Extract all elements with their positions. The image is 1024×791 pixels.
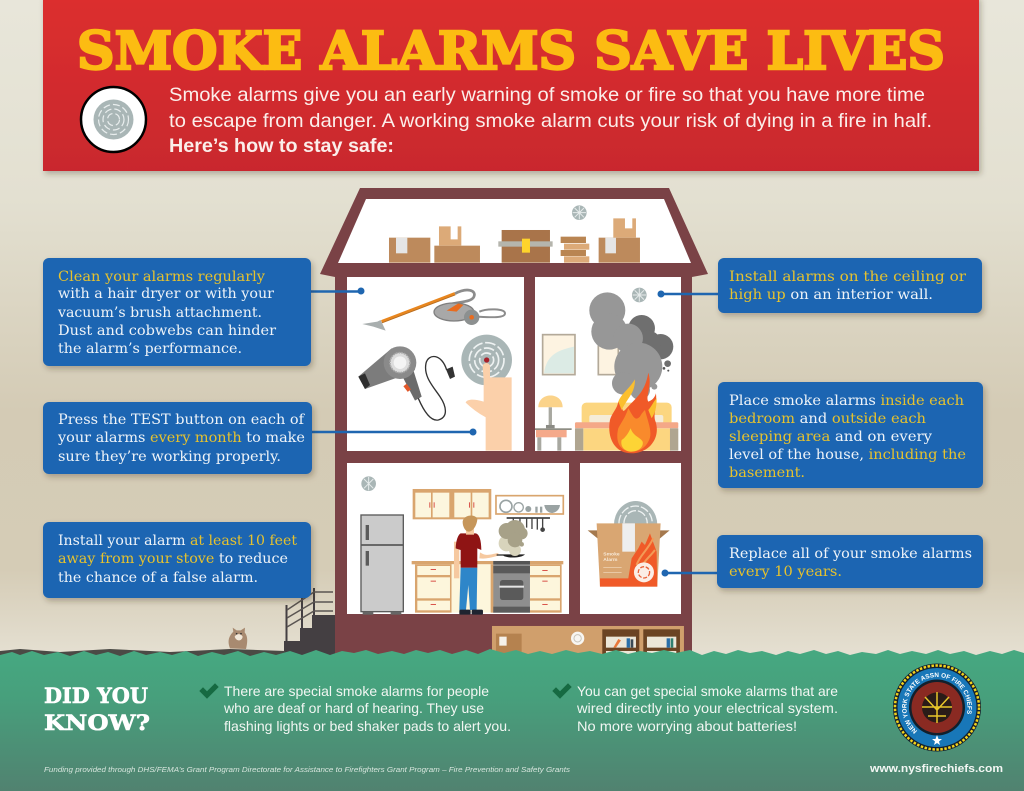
callout: replace alarms [717,535,983,588]
title: SMOKE ALARMS SAVE LIVES [77,21,945,82]
connector: ceiling [658,290,722,298]
icon: smoke alarm badge [81,87,146,152]
storage chest [498,230,553,263]
connector: clean alarms [305,288,364,294]
green lawn panel [0,649,1024,791]
callout: stove distance: away from your stove to reduce [58,551,288,567]
refrigerator [361,515,403,615]
attic room [338,199,691,263]
intro text [169,84,932,157]
upper cabinets [413,489,491,519]
room: replacement [580,463,681,614]
did you know heading: DID YOU [44,683,148,708]
fact two: No more worrying about batteries! [577,718,797,734]
kitchen contents [361,476,563,615]
stack of books [561,237,589,263]
did you know heading: KNOW? [44,710,150,735]
hanging utensils [507,518,550,531]
fact two: wired directly into your electrical system. [576,700,838,716]
callout: clean alarms: vacuum’s brush attachment. [57,305,262,321]
logo: fire chiefs seal [893,664,981,752]
callout: ceiling placement: high up on an interior wall. [729,287,933,303]
fact one: There are special smoke alarms for people [224,683,489,699]
callout: clean alarms: the alarm’s performance. [58,341,242,357]
callout: test button [43,402,312,474]
callout: clean alarms: with a hair dryer or with your [58,286,274,302]
cat [229,628,247,649]
header banner [43,0,979,171]
basement [492,626,684,656]
room: kitchen [347,463,569,614]
wall pictures [543,335,618,375]
bedroom contents [535,288,678,453]
flames [609,373,657,453]
bookshelves [602,629,680,656]
icon: bedroom alarm [632,288,647,302]
icon: basement alarm [571,632,584,645]
callout: ceiling placement: Install alarms on the ceiling or [729,269,966,285]
callout: ceiling placement [718,258,982,313]
cardboard box [597,523,661,587]
lower cabinets [412,561,563,613]
connector: test button [305,428,476,436]
callout: replace alarms: every 10 years. [729,564,842,580]
icon: check mark [553,684,571,698]
big alarm [461,335,512,385]
did you know heading [44,683,150,735]
cleaning room contents [358,290,512,451]
icon: alarm in box [614,501,657,525]
cardboard box: Alarm [603,557,618,563]
connector: replace [662,570,722,576]
callout: stove distance: the chance of a false alarm. [58,570,258,586]
callout: stove distance [43,522,311,598]
exterior stairs [284,588,335,655]
smoke cloud [589,292,673,400]
callout: clean alarms: Dust and cobwebs can hinder [58,323,276,339]
stove smoke [499,520,528,556]
icon: check mark [200,684,218,698]
hair dryer [358,346,455,420]
fact one: who are deaf or hard of hearing. They use [223,700,484,716]
vacuum cleaner [362,290,505,331]
callout: replace alarms: Replace all of your smoke alarms [729,546,972,562]
callout: bedroom placement: Place smoke alarms inside each [729,393,964,409]
attic contents [389,205,640,263]
callout: clean alarms: Clean your alarms regularly [58,269,265,285]
person cooking [454,516,525,615]
room: cleaning [347,277,524,451]
intro text: Smoke alarms give you an early warning of smoke or fire so that you have more time [169,84,925,106]
stove [493,561,530,613]
logo: fire chiefs seal: NEW YORK STATE ASSN OF FIRE CHIEFS [902,672,972,734]
fact two [553,683,838,734]
icon: kitchen alarm [361,476,376,491]
hand pressing button [466,363,512,451]
bed [575,403,678,451]
callout: bedroom placement: level of the house, including the [729,447,966,463]
dish shelf [496,496,563,514]
callout: test button: Press the TEST button on each of [58,412,306,428]
fact one [200,683,511,734]
callout: bedroom placement: sleeping area and on every [729,429,932,445]
callout: clean alarms [43,258,311,366]
bedside lamp and table [535,396,572,451]
cardboard box: Smoke [603,552,620,558]
fact two: You can get special smoke alarms that are [577,683,838,699]
house structure [320,188,708,655]
basement box [496,634,522,655]
ground strip [0,649,285,660]
new alarm in box [588,501,670,587]
fact one: flashing lights or bed shaker pads to alert you. [224,718,511,734]
callout: stove distance: Install your alarm at least 10 feet [58,533,297,549]
callout: bedroom placement: basement. [729,465,805,481]
intro text: to escape from danger. A working smoke alarm cuts your risk of dying in a fire in half. [169,110,932,132]
callout: test button: your alarms every month to make [57,430,305,446]
intro text: Here’s how to stay safe: [169,135,394,157]
funding note: Funding provided through DHS/FEMA’s Grant Program Directorate for Assistance to Firefighters Grant Program – Fire Prevention and Safety Grants [44,765,570,774]
callout: bedroom placement: bedroom and outside each [729,411,926,427]
callout: test button: sure they’re working properly. [58,449,281,465]
icon: attic alarm [572,205,587,220]
room: bedroom [535,277,681,451]
box flaps [588,530,670,539]
storage boxes [389,218,640,263]
website: www.nysfirechiefs.com [869,763,1003,775]
callout: bedroom placement [718,382,983,488]
